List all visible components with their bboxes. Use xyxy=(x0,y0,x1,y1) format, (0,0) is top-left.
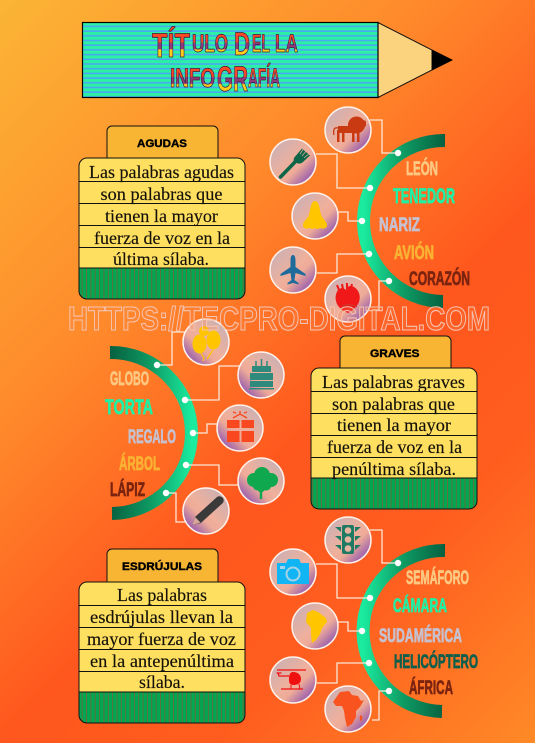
panel: graves xyxy=(311,336,477,509)
arc xyxy=(363,140,445,302)
title: EL xyxy=(252,30,270,58)
connectors xyxy=(316,120,398,310)
labels: TENEDOR xyxy=(393,185,455,208)
title: D xyxy=(234,26,250,62)
arc xyxy=(363,550,445,712)
labels: AVIÓN xyxy=(394,242,434,264)
icon: balloons xyxy=(183,319,229,365)
text box: agudas xyxy=(79,158,245,299)
text box: agudas: son palabras que xyxy=(100,184,223,204)
heading tab: graves: GRAVES xyxy=(370,348,420,360)
arc xyxy=(110,352,191,514)
labels: NARIZ xyxy=(379,215,420,236)
text box: agudas: última sílaba. xyxy=(113,249,209,269)
labels: SEMÁFORO xyxy=(406,567,469,589)
icon: gift xyxy=(217,405,263,451)
icon: traffic light xyxy=(325,517,371,563)
title: INFO xyxy=(170,63,215,93)
pencil striped body xyxy=(82,22,378,98)
icon: africa xyxy=(325,686,371,732)
text box: graves: Las palabras graves xyxy=(322,372,465,392)
connectors xyxy=(157,332,239,522)
labels: HELICÓPTERO xyxy=(394,651,478,673)
panel: esdrujulas xyxy=(79,549,245,723)
diagram: graves word wheel xyxy=(105,319,284,534)
text box: graves xyxy=(311,368,477,509)
dots xyxy=(154,362,196,496)
panel: agudas xyxy=(79,126,245,299)
labels xyxy=(379,158,470,290)
labels: REGALO xyxy=(128,427,176,448)
icon: lion xyxy=(325,107,371,153)
title: TÍT xyxy=(152,27,190,65)
heading tab: agudas xyxy=(107,126,218,158)
text box: agudas: Las palabras agudas xyxy=(89,162,234,182)
icon: nose xyxy=(292,193,338,239)
diagram: agudas word wheel xyxy=(270,107,470,322)
dots xyxy=(359,560,401,694)
dots xyxy=(359,150,401,284)
text box: esdrujulas xyxy=(79,582,245,723)
text box: esdrujulas: Las palabras xyxy=(117,585,207,605)
heading tab: graves xyxy=(340,336,451,368)
icon: fork xyxy=(270,139,316,185)
pencil lead xyxy=(432,50,453,70)
text box: graves: fuerza de voz en la xyxy=(327,437,462,457)
icon: helicopter xyxy=(270,657,316,703)
diagram: esdrujulas word wheel xyxy=(270,517,478,732)
icon: pencil xyxy=(183,488,229,534)
pencil tip wood xyxy=(378,22,432,98)
connectors xyxy=(316,530,398,720)
text box: esdrujulas: esdrújulas llevan la xyxy=(90,607,233,627)
labels: SUDAMÉRICA xyxy=(379,625,462,647)
text box: esdrujulas: sílaba. xyxy=(139,672,185,692)
icon: cake xyxy=(238,352,284,398)
text box: graves: tienen la mayor xyxy=(337,415,451,435)
icon: south america xyxy=(292,603,338,649)
labels xyxy=(379,567,478,699)
labels: ÁRBOL xyxy=(119,453,160,475)
icon: camera xyxy=(270,549,316,595)
text box: agudas: tienen la mayor xyxy=(105,206,218,226)
heading tab: esdrujulas xyxy=(107,549,218,582)
title: ULO xyxy=(192,30,228,58)
title: LA xyxy=(275,30,298,58)
labels xyxy=(105,369,176,501)
pencil title banner xyxy=(82,22,453,99)
labels: ÁFRICA xyxy=(409,677,453,699)
icon: heart xyxy=(325,276,371,322)
title xyxy=(152,26,298,99)
labels: GLOBO xyxy=(110,369,149,390)
labels: CORAZÓN xyxy=(409,268,470,290)
icon: airplane xyxy=(270,247,316,293)
labels: LÁPIZ xyxy=(110,479,145,501)
text box: graves: penúltima sílaba. xyxy=(332,459,456,479)
labels: CÁMARA xyxy=(393,595,447,617)
labels: LEÓN xyxy=(406,158,438,180)
heading tab: agudas: AGUDAS xyxy=(137,138,187,150)
text box: graves: son palabras que xyxy=(332,394,455,414)
title: GR xyxy=(217,60,248,99)
text box: esdrujulas: mayor fuerza de voz xyxy=(87,629,236,649)
icon: tree xyxy=(238,458,284,504)
heading tab: esdrujulas: ESDRÚJULAS xyxy=(122,560,202,573)
text box: esdrujulas: en la antepenúltima xyxy=(90,651,234,671)
text box: agudas: fuerza de voz en la xyxy=(94,228,230,248)
title: AFÍA xyxy=(248,62,280,93)
labels: TORTA xyxy=(105,396,153,419)
